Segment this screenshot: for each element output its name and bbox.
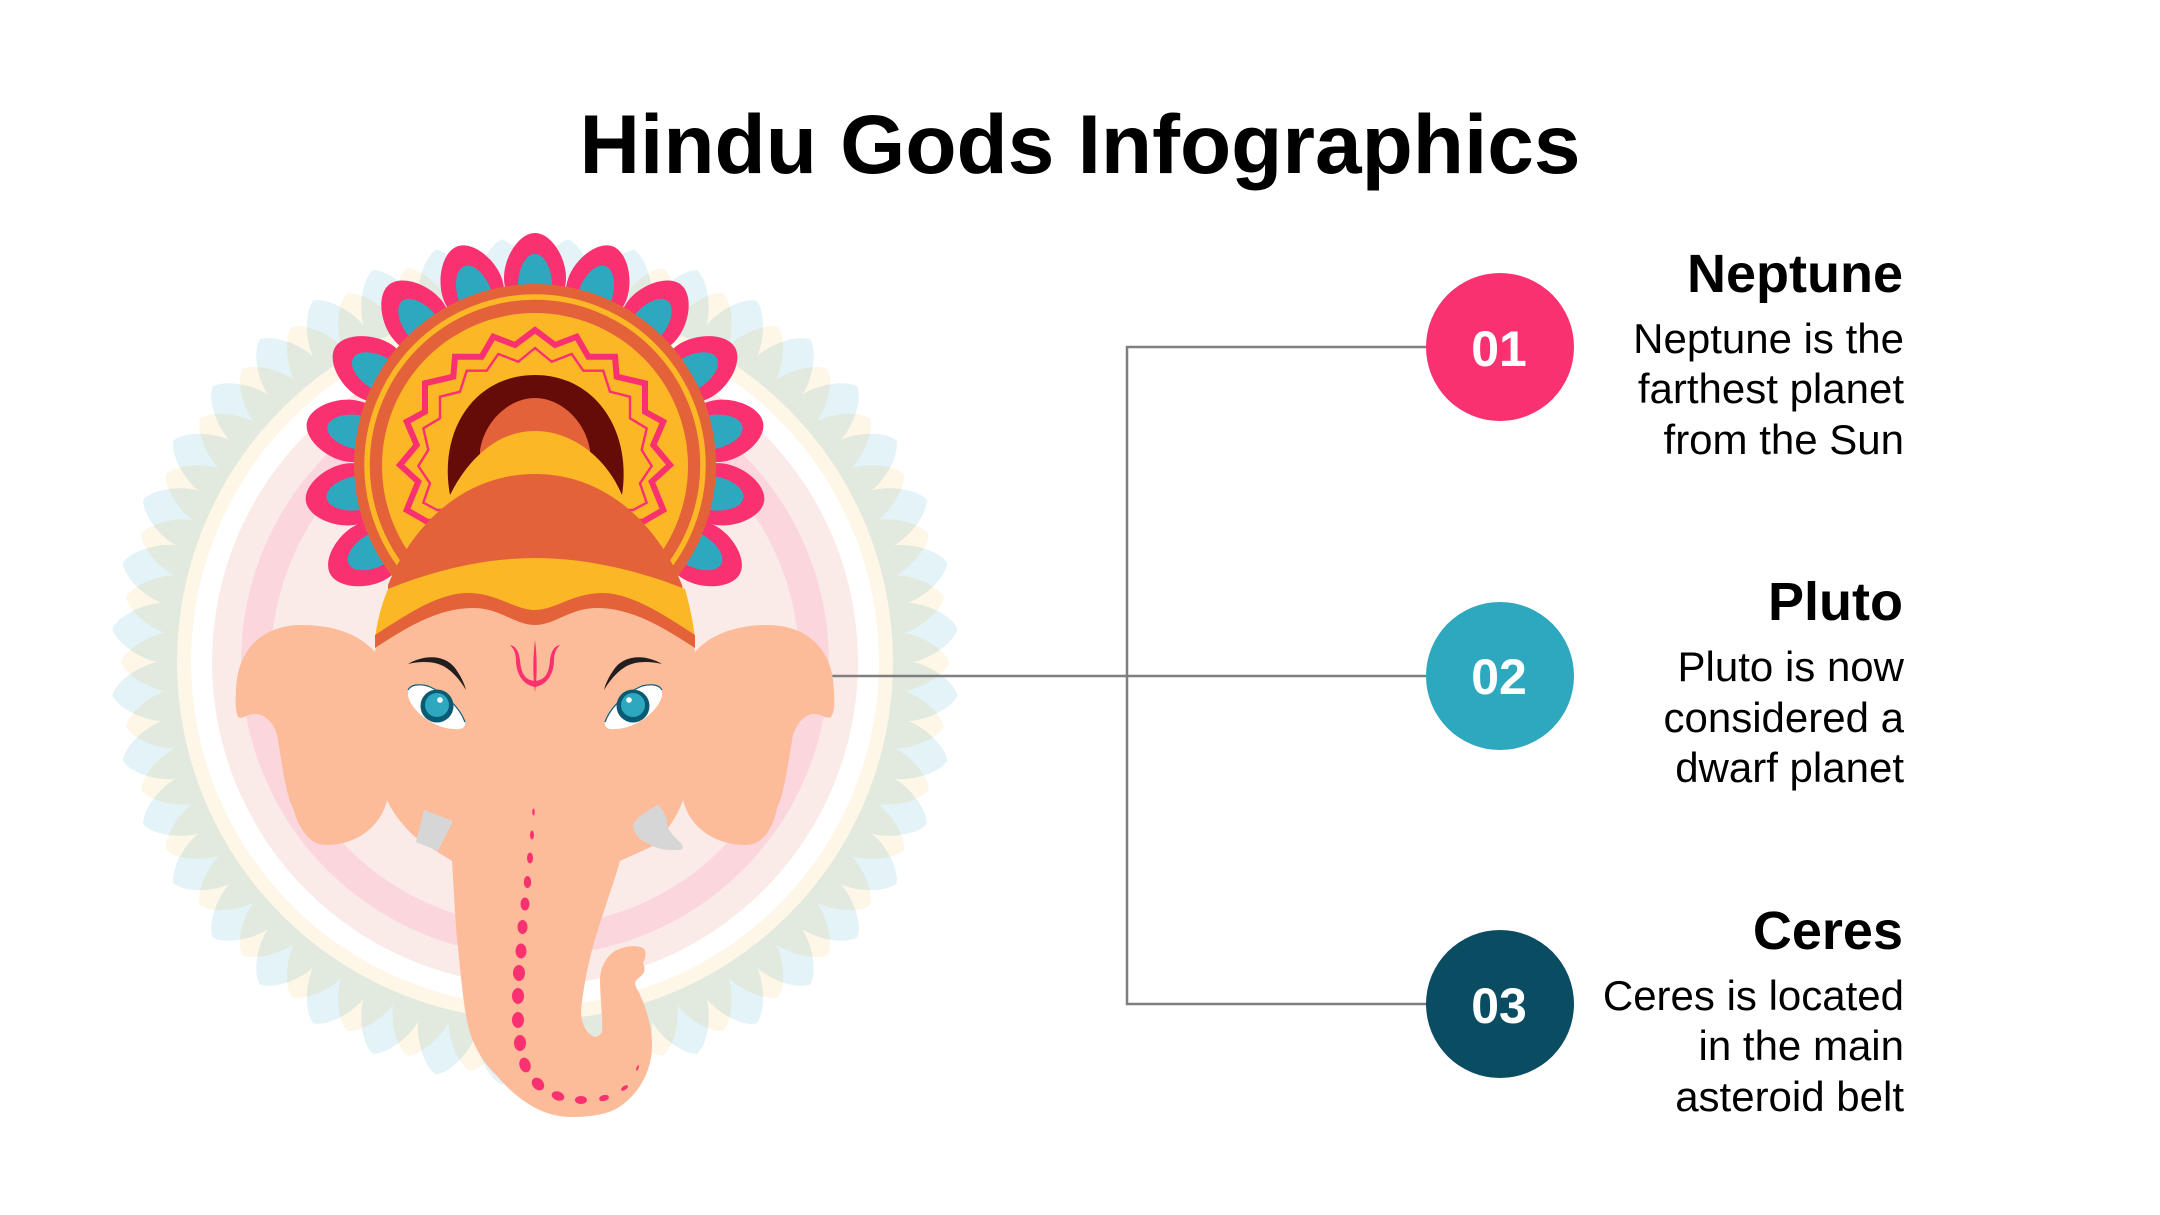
connector lines	[832, 347, 1427, 1004]
text block: Pluto	[1664, 572, 1905, 791]
text block: Ceres	[1603, 901, 1904, 1120]
text block: Pluto: considered a	[1664, 694, 1905, 741]
badge 01: 01	[1471, 321, 1527, 377]
text block: Pluto: Pluto	[1768, 572, 1903, 632]
background mandala	[110, 237, 960, 1087]
left tusk	[416, 810, 453, 851]
badge 03: 03	[1471, 978, 1527, 1034]
text block: Neptune: from the Sun	[1664, 416, 1904, 463]
ganesha illustration	[236, 233, 834, 1117]
trident mark	[510, 640, 560, 692]
text block: Ceres: Ceres is located	[1603, 972, 1904, 1019]
text block: Ceres: asteroid belt	[1675, 1073, 1904, 1120]
crown petals	[301, 233, 769, 601]
title: Hindu Gods Infographics	[580, 97, 1580, 191]
badge 02	[1426, 602, 1574, 750]
text block: Ceres: in the main	[1699, 1022, 1904, 1069]
trunk dots	[512, 808, 639, 1104]
text block: Pluto: Pluto is now	[1678, 643, 1905, 690]
badge 02: 02	[1471, 649, 1527, 705]
crown band trim	[375, 593, 695, 648]
elephant head and trunk	[236, 600, 834, 1117]
text block: Ceres: Ceres	[1753, 901, 1903, 961]
text block: Neptune: farthest planet	[1638, 365, 1904, 412]
crown halo	[354, 284, 716, 646]
text block: Pluto: dwarf planet	[1675, 744, 1904, 791]
right tusk	[633, 805, 683, 850]
left eye	[408, 657, 466, 729]
right eye	[604, 657, 662, 729]
crown dome	[388, 474, 685, 600]
text block: Neptune: Neptune	[1687, 244, 1903, 304]
text block: Neptune	[1633, 244, 1904, 463]
crown band	[375, 558, 695, 640]
badge 03	[1426, 930, 1574, 1078]
text block: Neptune: Neptune is the	[1633, 315, 1904, 362]
badge 01	[1426, 273, 1574, 421]
